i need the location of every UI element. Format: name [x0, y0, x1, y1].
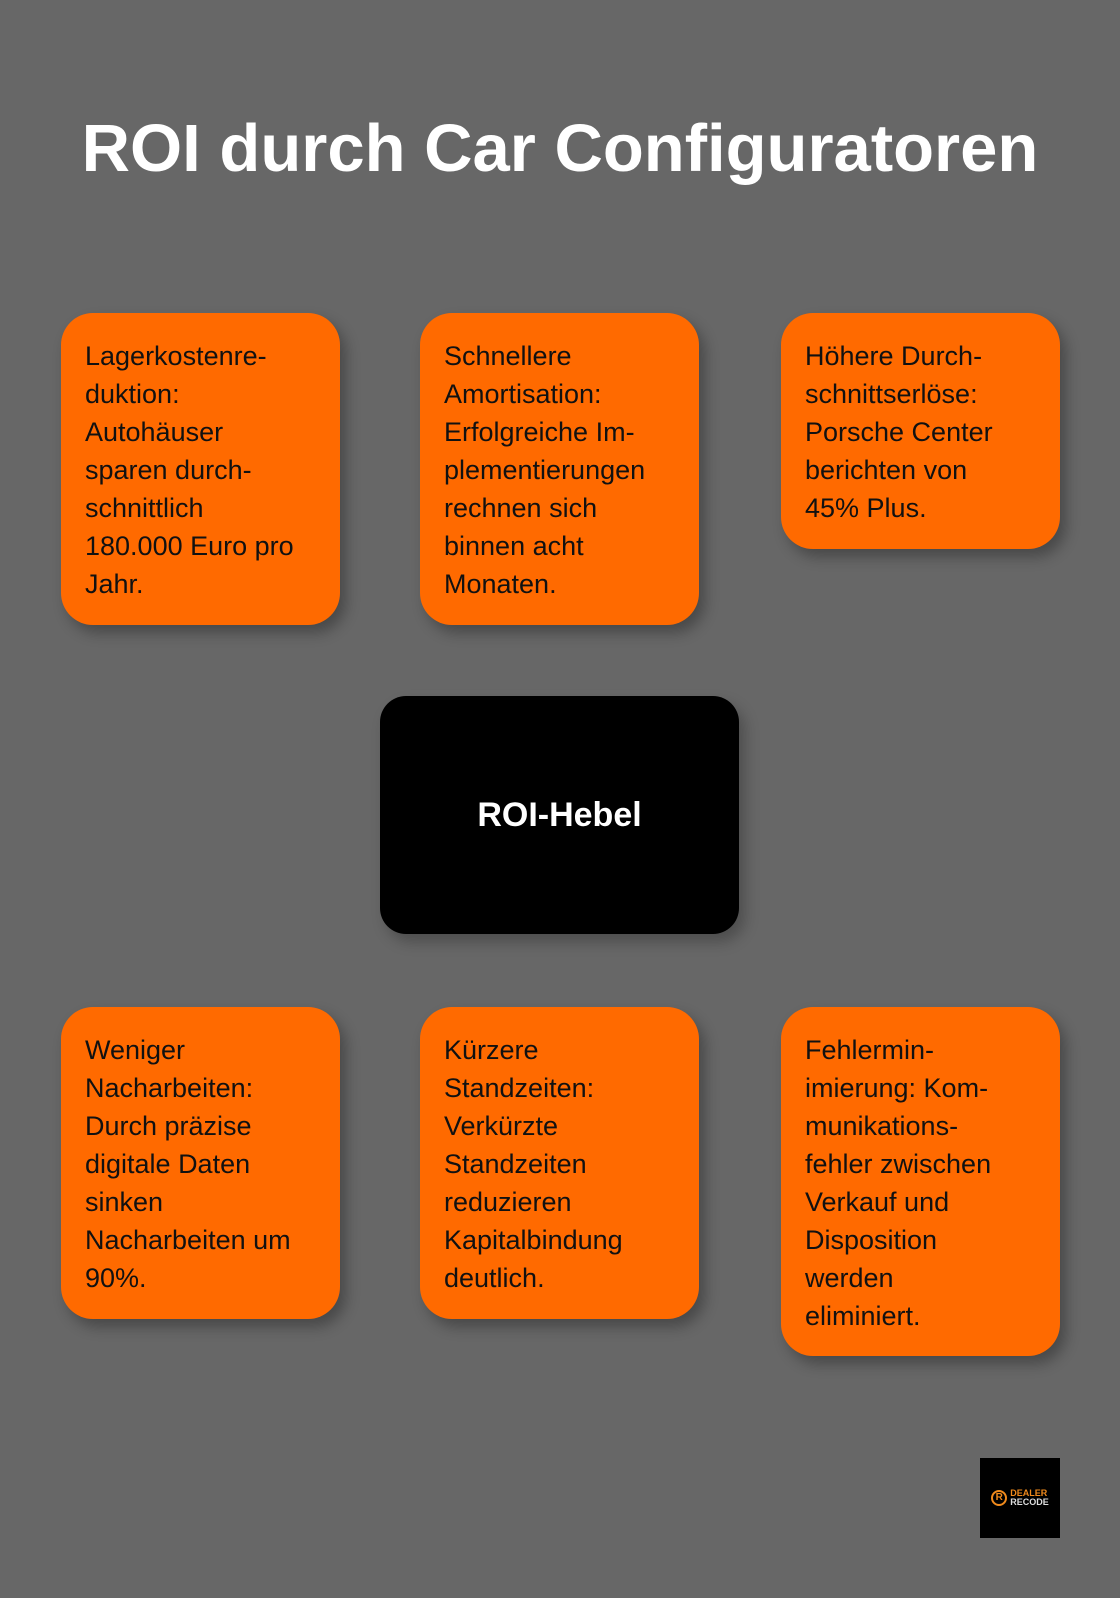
box: Schnellere Amortisation: rechnen sich: [444, 493, 597, 523]
logo: RECODE: [1010, 1497, 1049, 1507]
box: Lagerkostenreduktion: [61, 313, 340, 625]
box: Schnellere Amortisation: plementierungen: [444, 455, 645, 485]
box: Weniger Nacharbeiten: Nacharbeiten:: [85, 1073, 253, 1103]
box: Fehlerminimierung: fehler zwischen: [805, 1149, 991, 1179]
logo: [980, 1458, 1060, 1538]
box: Kürzere Standzeiten: Standzeiten:: [444, 1073, 594, 1103]
box: Schnellere Amortisation: Erfolgreiche Im-: [444, 417, 635, 447]
box: Weniger Nacharbeiten: [61, 1007, 340, 1319]
box: Fehlerminimierung: eliminiert.: [805, 1301, 921, 1331]
center: ROI-Hebel: ROI-Hebel: [477, 796, 642, 834]
logo: DEALER: [1010, 1488, 1047, 1498]
box: Weniger Nacharbeiten: sinken: [85, 1187, 163, 1217]
box: Kürzere Standzeiten: Verkürzte: [444, 1111, 558, 1141]
box: Weniger Nacharbeiten: digitale Daten: [85, 1149, 250, 1179]
box: Lagerkostenreduktion: duktion:: [85, 379, 180, 409]
box: Schnellere Amortisation: [420, 313, 699, 625]
box: Weniger Nacharbeiten: 90%.: [85, 1263, 147, 1293]
box: Schnellere Amortisation: Schnellere: [444, 341, 572, 371]
box: Lagerkostenreduktion: Jahr.: [85, 569, 144, 599]
box: Lagerkostenreduktion: sparen durch-: [85, 455, 252, 485]
box: Kürzere Standzeiten: reduzieren: [444, 1187, 572, 1217]
box: Lagerkostenreduktion: schnittlich: [85, 493, 204, 523]
box: Weniger Nacharbeiten: Weniger: [85, 1035, 185, 1065]
box: Höhere Durchschnittserlöse: [781, 313, 1060, 549]
box: Fehlerminimierung: Fehlermin-: [805, 1035, 934, 1065]
box: Höhere Durchschnittserlöse: schnittserlöse:: [805, 379, 978, 409]
box: Höhere Durchschnittserlöse: berichten von: [805, 455, 967, 485]
title: ROI durch Car Configuratoren: [82, 111, 1038, 186]
box: Kürzere Standzeiten: [420, 1007, 699, 1319]
box: Kürzere Standzeiten: Kapitalbindung: [444, 1225, 623, 1255]
box: Lagerkostenreduktion: Lagerkostenre-: [85, 341, 267, 371]
box: Fehlerminimierung: werden: [805, 1263, 894, 1293]
box: Fehlerminimierung: Disposition: [805, 1225, 937, 1255]
box: Weniger Nacharbeiten: Nacharbeiten um: [85, 1225, 291, 1255]
box: Fehlerminimierung: Verkauf und: [805, 1187, 949, 1217]
box: Lagerkostenreduktion: 180.000 Euro pro: [85, 531, 294, 561]
box: Fehlerminimierung: [781, 1007, 1060, 1356]
box: Schnellere Amortisation: binnen acht: [444, 531, 584, 561]
box: Lagerkostenreduktion: Autohäuser: [85, 417, 223, 447]
box: Höhere Durchschnittserlöse: Höhere Durch-: [805, 341, 982, 371]
box: Kürzere Standzeiten: deutlich.: [444, 1263, 545, 1293]
box: Höhere Durchschnittserlöse: 45% Plus.: [805, 493, 927, 523]
center: ROI-Hebel: [380, 696, 739, 934]
box: Schnellere Amortisation: Monaten.: [444, 569, 557, 599]
box: Kürzere Standzeiten: Standzeiten: [444, 1149, 587, 1179]
logo: R: [996, 1492, 1003, 1503]
box: Höhere Durchschnittserlöse: Porsche Center: [805, 417, 993, 447]
box: Weniger Nacharbeiten: Durch präzise: [85, 1111, 252, 1141]
box: Kürzere Standzeiten: Kürzere: [444, 1035, 539, 1065]
box: Fehlerminimierung: imierung: Kom-: [805, 1073, 988, 1103]
box: Fehlerminimierung: munikations-: [805, 1111, 958, 1141]
box: Schnellere Amortisation: Amortisation:: [444, 379, 602, 409]
